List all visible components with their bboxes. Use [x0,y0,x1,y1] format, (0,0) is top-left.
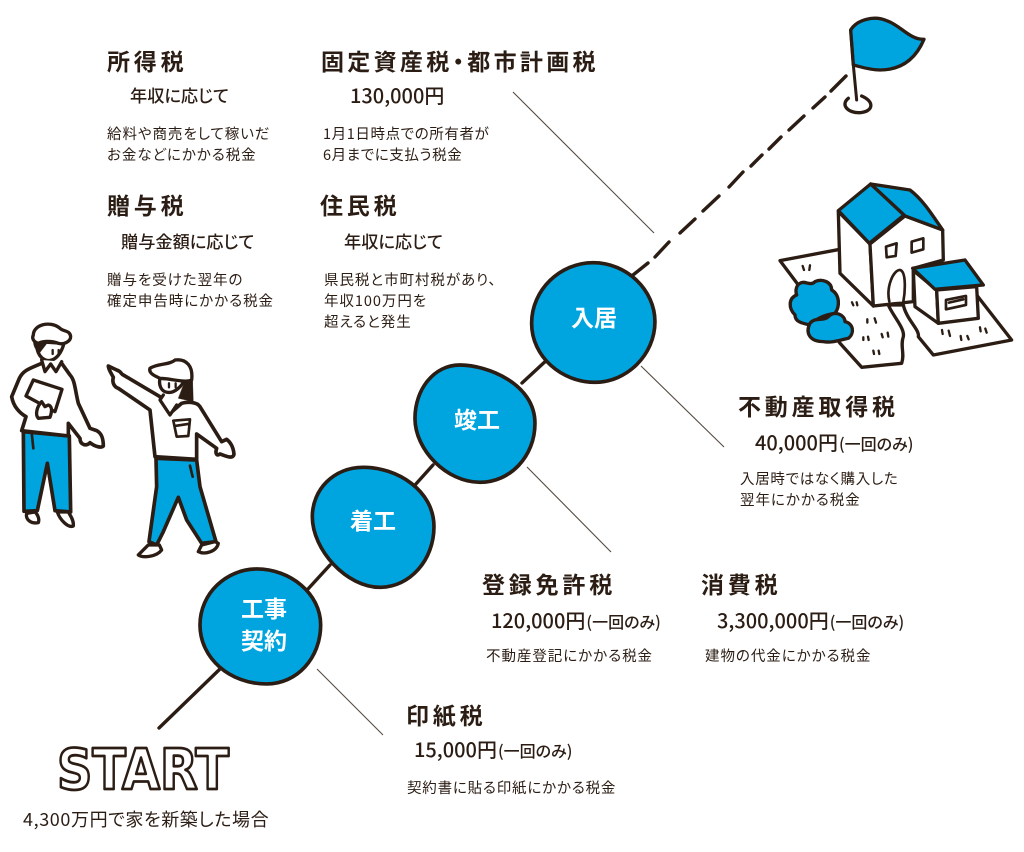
stage: 竣工 [415,365,535,482]
side wall [838,212,873,306]
start caption: 4,300万円で家を新築した場合 [23,806,269,832]
tax: 印紙税 [406,697,616,798]
tax: 登録免許税: 不動産登記にかかる税金 [486,645,653,666]
tax: 登録免許税 [482,566,661,666]
start label: START [57,738,229,803]
shoes [26,512,73,526]
tax: 贈与税: 贈与税 [107,187,187,221]
tax: 消費税: 消費税 [701,566,781,600]
icon: goal flag [845,18,924,113]
tax: 消費税: 3,300,000円(一回のみ) [717,605,904,634]
tax: 住民税: 住民税 [320,187,400,221]
tax: 消費税: 建物の代金にかかる税金 [705,645,871,666]
stage: 入居: 入居 [571,299,617,333]
tax: 贈与税: 贈与金額に応じて [121,228,254,253]
trousers [23,432,71,512]
roof [871,184,943,230]
hair and head [178,380,193,402]
tax: 所得税 [107,43,270,165]
annex [913,271,938,323]
front wall [870,216,943,306]
tax: 所得税: 年収に応じて [130,82,229,107]
tax: 所得税: 給料や商売をして稼いだ [107,123,270,144]
icon: house [780,184,1012,367]
grass [803,265,987,354]
trousers [149,458,216,545]
tax: 贈与税: 贈与を受けた翌年の [107,269,243,290]
head [37,342,64,361]
connector lines [159,358,549,728]
pocket [173,419,190,437]
bushes [790,280,838,325]
tax: 固定資産税・都市計画税: 130,000円 [350,80,444,109]
tax: 不動産取得税: 40,000円(一回のみ) [755,427,913,456]
dashed path to goal [633,76,846,275]
sweatshirt [12,363,103,447]
tax: 贈与税: 確定申告時にかかる税金 [107,290,274,311]
stage: 工事契約: 工事 [241,590,287,624]
tax: 所得税: お金などにかかる税金 [107,144,257,165]
tax: 不動産取得税 [738,388,913,510]
tax: 登録免許税: 登録免許税 [482,566,616,600]
tax: 住民税: 年収に応じて [344,228,443,253]
stage: 入居 [532,263,655,382]
tax: 固定資産税・都市計画税: 6月までに支払う税金 [323,144,462,165]
door and windows [888,270,905,302]
tax: 不動産取得税: 翌年にかかる税金 [740,489,861,510]
tax: 住民税 [320,187,497,332]
tax: 所得税: 所得税 [107,43,187,77]
illustration: person with clipboard [12,324,103,526]
sweatshirt with pointing arm [108,366,234,459]
tax: 印紙税: 15,000円(一回のみ) [414,734,572,763]
stage: 工事契約 [200,569,321,684]
leader lines [317,92,724,735]
ground [780,249,1012,367]
stage: 着工 [312,467,434,587]
tax: 消費税 [701,566,904,666]
tax: 固定資産税・都市計画税: 1月1日時点での所有者が [323,123,490,144]
route line with stages [159,76,846,728]
tax: 印紙税: 契約書に貼る印紙にかかる税金 [407,777,616,798]
tax: 不動産取得税: 入居時ではなく購入した [740,468,898,489]
clipboard [26,380,62,412]
tax: 住民税: 年収100万円を [324,290,427,311]
tax: 住民税: 超えると発生 [324,311,412,332]
tax: 印紙税: 印紙税 [406,697,486,731]
shoes [138,542,218,557]
tax: 住民税: 県民税と市町村税があり、 [324,269,497,290]
tax: 固定資産税・都市計画税: 固定資産税・都市計画税 [321,43,599,77]
stage: 着工: 着工 [350,502,396,536]
tax: 固定資産税・都市計画税 [321,43,599,165]
tax: 不動産取得税: 不動産取得税 [738,388,899,422]
tax: 登録免許税: 120,000円(一回のみ) [491,605,661,634]
stage: 工事契約: 契約 [241,622,287,656]
stage: 竣工: 竣工 [454,401,500,435]
illustration: person pointing [108,360,234,557]
tax: 贈与税 [107,187,274,311]
